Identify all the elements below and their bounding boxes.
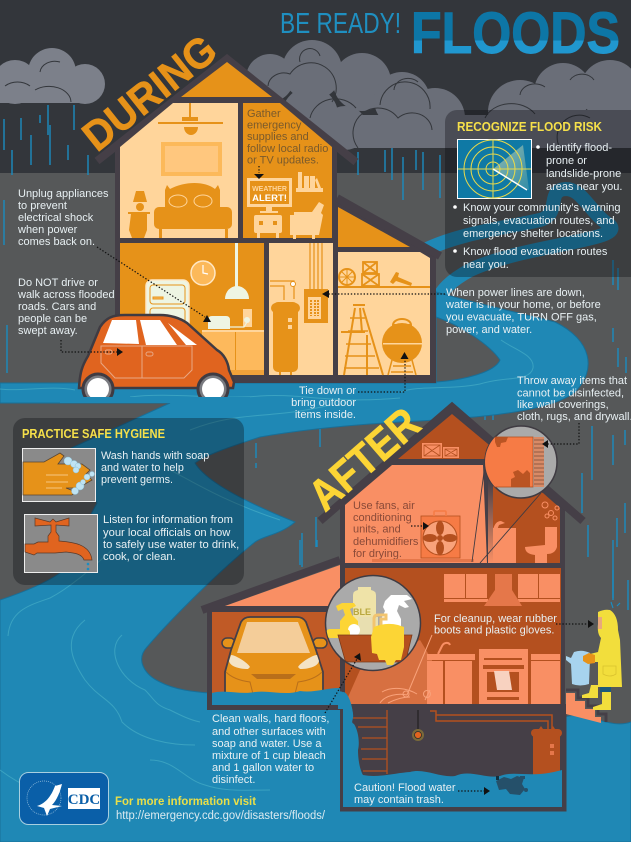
pendant lamp: [225, 286, 249, 299]
text: fans: Use fans, air: [353, 500, 415, 512]
woman in raincoat: [566, 610, 622, 710]
garage: [338, 252, 430, 375]
face: [598, 617, 602, 629]
text: throw away: cloth, rugs, and drywall.: [517, 411, 631, 423]
outlet: [243, 309, 252, 327]
trousers: [600, 687, 611, 692]
basement: [340, 692, 565, 811]
pole: [235, 243, 238, 287]
weather arrow: [254, 166, 264, 179]
text: clean walls: soap and water. Use a: [212, 738, 322, 750]
radio advice text: Gather: [247, 108, 281, 120]
bullet list: Know flood evacuation routes: [463, 246, 608, 258]
text: listen: to safely use water to drink,: [103, 539, 239, 551]
splash near head: [611, 602, 620, 608]
kitchen: [120, 243, 264, 375]
grill: [382, 319, 422, 375]
text: clean walls: and 1 gallon water to: [212, 762, 314, 774]
bullet list: Identify flood-: [546, 142, 612, 154]
power text: you evacuate, TURN OFF gas,: [446, 312, 597, 324]
boots arrow: [556, 620, 594, 628]
boots: [582, 685, 611, 710]
lower cabinets: [427, 649, 560, 704]
fan icon: [372, 511, 474, 562]
text: fans: dehumidifiers: [353, 536, 419, 548]
attic: [181, 62, 272, 97]
text: listen: Listen for information from: [103, 514, 233, 526]
text: wash hands: Wash hands with soap: [101, 450, 209, 462]
panel heading: PRACTICE SAFE HYGIENE: [22, 427, 165, 441]
wall arrow: [542, 423, 579, 448]
power text: water is in your home, or before: [445, 299, 601, 311]
pipes: [430, 711, 552, 729]
trash arrow: [458, 787, 490, 795]
living room: [243, 103, 332, 239]
text: caution: Caution! Flood water: [354, 782, 456, 794]
upper cabinets: [444, 574, 560, 602]
icon: faucet: [24, 514, 98, 572]
bullet list: areas near you.: [546, 181, 622, 193]
bullet list: emergency shelter locations.: [463, 228, 603, 240]
power text: When power lines are down,: [446, 287, 585, 299]
text: cleanup: For cleanup, wear rubber: [434, 613, 557, 625]
coat pocket: [603, 666, 616, 676]
footer text: http://emergency.cdc.gov/disasters/floods/: [116, 810, 326, 822]
basement stairs: [353, 710, 387, 774]
river and flood water: [0, 292, 631, 842]
bullet list: landslide-prone: [546, 168, 621, 180]
river upper bend: [425, 189, 611, 305]
trash: [496, 776, 528, 795]
during heading: DURING: [73, 26, 225, 160]
logo: CDC box: CDC: [68, 792, 100, 808]
tub: [338, 635, 412, 662]
unplug text: electrical shock: [18, 212, 94, 224]
flooded car: [222, 617, 327, 700]
main body: [340, 410, 565, 710]
yellow spray: [336, 603, 358, 635]
bullet list: signals, evacuation routes, and: [463, 215, 615, 227]
ceiling fan: [158, 103, 223, 135]
power text: power, and water.: [446, 324, 532, 336]
text: fans: units, and: [353, 524, 401, 536]
brush: [374, 615, 386, 637]
bedroom: [120, 103, 238, 238]
garage water: [212, 688, 340, 705]
bucket: [566, 651, 590, 686]
roof: [320, 407, 583, 521]
text: fans: for drying.: [353, 548, 402, 560]
white spray: [382, 595, 412, 626]
text: listen: your local officials on how: [103, 527, 231, 539]
cabinet: [202, 330, 264, 375]
after heading: AFTER: [299, 398, 430, 521]
circle: cleaning supplies: BLE: [353, 607, 371, 617]
text: wash hands: and water to help: [101, 462, 184, 474]
boiler: [531, 726, 562, 778]
cleaning arrow: [325, 653, 361, 713]
icon: washing hands: [22, 448, 96, 502]
radio advice text: or TV updates.: [247, 154, 319, 166]
tie down text: Tie down or: [299, 385, 356, 397]
panel: recognize flood risk: [445, 110, 631, 277]
weather alert tv: WEATHER: [252, 186, 287, 193]
do not drive text: roads. Cars and: [18, 301, 96, 313]
grill arrow: [358, 352, 408, 392]
fridge: [146, 280, 189, 330]
box: [376, 617, 378, 626]
text: clean walls: disinfect.: [212, 774, 255, 786]
bullet list: prone or: [546, 155, 587, 167]
hand: [583, 653, 595, 664]
electrical panel: [304, 289, 328, 323]
rain: [4, 105, 628, 610]
bed: [154, 183, 232, 238]
tie down text: items inside.: [295, 409, 356, 421]
garage structure: [207, 606, 345, 710]
do not drive text: Do NOT drive or: [18, 277, 98, 289]
footer text: For more information visit: [115, 794, 256, 808]
radio advice text: supplies and: [247, 131, 309, 143]
panel: practice safe hygiene: [13, 418, 244, 585]
roof lower: [337, 198, 440, 256]
attic: [398, 414, 506, 459]
sponge: [326, 629, 350, 638]
fan arrow: [411, 522, 429, 530]
gray bend inside river: [436, 317, 500, 382]
flood water over wheels: [60, 397, 250, 403]
bullet list: near you.: [463, 259, 509, 271]
radio advice text: follow local radio: [247, 143, 328, 155]
water ripple lines: [0, 340, 533, 796]
upper room: [345, 465, 487, 563]
basement water: [343, 692, 562, 807]
text: throw away: like wall coverings,: [517, 399, 609, 411]
text: throw away: Throw away items that: [517, 375, 627, 387]
text: clean walls: Clean walls, hard floors,: [212, 713, 329, 725]
bullet list: Know your community’s warning: [463, 202, 621, 214]
radio advice text: emergency: [247, 120, 302, 132]
car arrow: [61, 340, 123, 356]
magnify lines: [472, 472, 541, 563]
text: clean walls: and other surfaces with: [212, 726, 326, 738]
text: fans: conditioning: [353, 512, 412, 524]
wall picture: [161, 142, 222, 176]
armchair: [290, 202, 324, 239]
car: [79, 315, 234, 404]
do not drive text: people can be: [18, 313, 87, 325]
clouds: [0, 40, 631, 150]
bookshelf: [296, 172, 323, 192]
after house: [202, 407, 594, 811]
ground background: [0, 173, 631, 842]
beam: [345, 640, 432, 704]
crates: [362, 262, 379, 286]
ladder: [341, 305, 383, 375]
text: throw away: cannot be disinfected,: [517, 388, 624, 400]
unplug text: to prevent: [18, 200, 67, 212]
gloves: [371, 624, 404, 665]
weather alert tv: [247, 178, 292, 213]
garage triangle: [338, 207, 410, 247]
kitchen: [345, 568, 561, 704]
stairs outside: [566, 693, 601, 723]
circle: mold on wall: [480, 426, 557, 498]
lower frame: [208, 690, 565, 810]
unplug text: comes back on.: [18, 236, 95, 248]
during house: [97, 58, 440, 383]
stove details: [483, 658, 524, 700]
towel: [494, 671, 512, 690]
text: wash hands: prevent germs.: [101, 474, 173, 486]
mop: [380, 635, 432, 703]
clock: [191, 261, 215, 285]
bottle: [353, 587, 376, 621]
wheel: [339, 269, 355, 285]
stairs shadow: [566, 690, 606, 722]
text: cleanup: boots and plastic gloves.: [434, 624, 554, 636]
do not drive text: walk across flooded: [17, 289, 115, 301]
light bulb: [412, 710, 424, 741]
bath room: [488, 480, 560, 563]
utility room: [269, 243, 333, 375]
title: [280, 1, 620, 66]
tie down text: bring outdoor: [291, 397, 356, 409]
unplug text: when power: [17, 224, 78, 236]
hammer: [390, 272, 412, 286]
unplug text: Unplug appliances: [18, 188, 109, 200]
panel heading: RECOGNIZE FLOOD RISK: [457, 119, 603, 134]
logo: CDC: [20, 772, 108, 824]
weather alert tv: ALERT!: [252, 193, 287, 204]
text: caution: may contain trash.: [354, 794, 444, 806]
text: clean walls: mixture of 1 cup bleach: [212, 750, 326, 762]
tv stand: [254, 215, 282, 238]
coat: [590, 610, 622, 687]
logo: HHS eagle: [27, 781, 62, 816]
bullet list: [453, 142, 622, 271]
toaster: [208, 316, 247, 329]
do not drive text: swept away.: [18, 325, 78, 337]
nightstand lamp: [128, 191, 150, 238]
hood: [484, 574, 522, 606]
footer text: [115, 794, 326, 822]
faucet: [438, 643, 450, 654]
garage roof: [202, 560, 340, 610]
garage: [212, 565, 340, 705]
roof main: [97, 59, 356, 162]
circle: cleaning supplies: [326, 576, 420, 670]
text: listen: cook, or clean.: [103, 551, 176, 563]
appliance arrow: [97, 247, 211, 322]
icon: radar: [458, 140, 532, 198]
title: BE READY!: [280, 8, 401, 40]
power arrow: [322, 290, 445, 298]
house structure: [115, 58, 436, 383]
wave over wall: [338, 691, 353, 714]
sky background: [0, 0, 631, 174]
